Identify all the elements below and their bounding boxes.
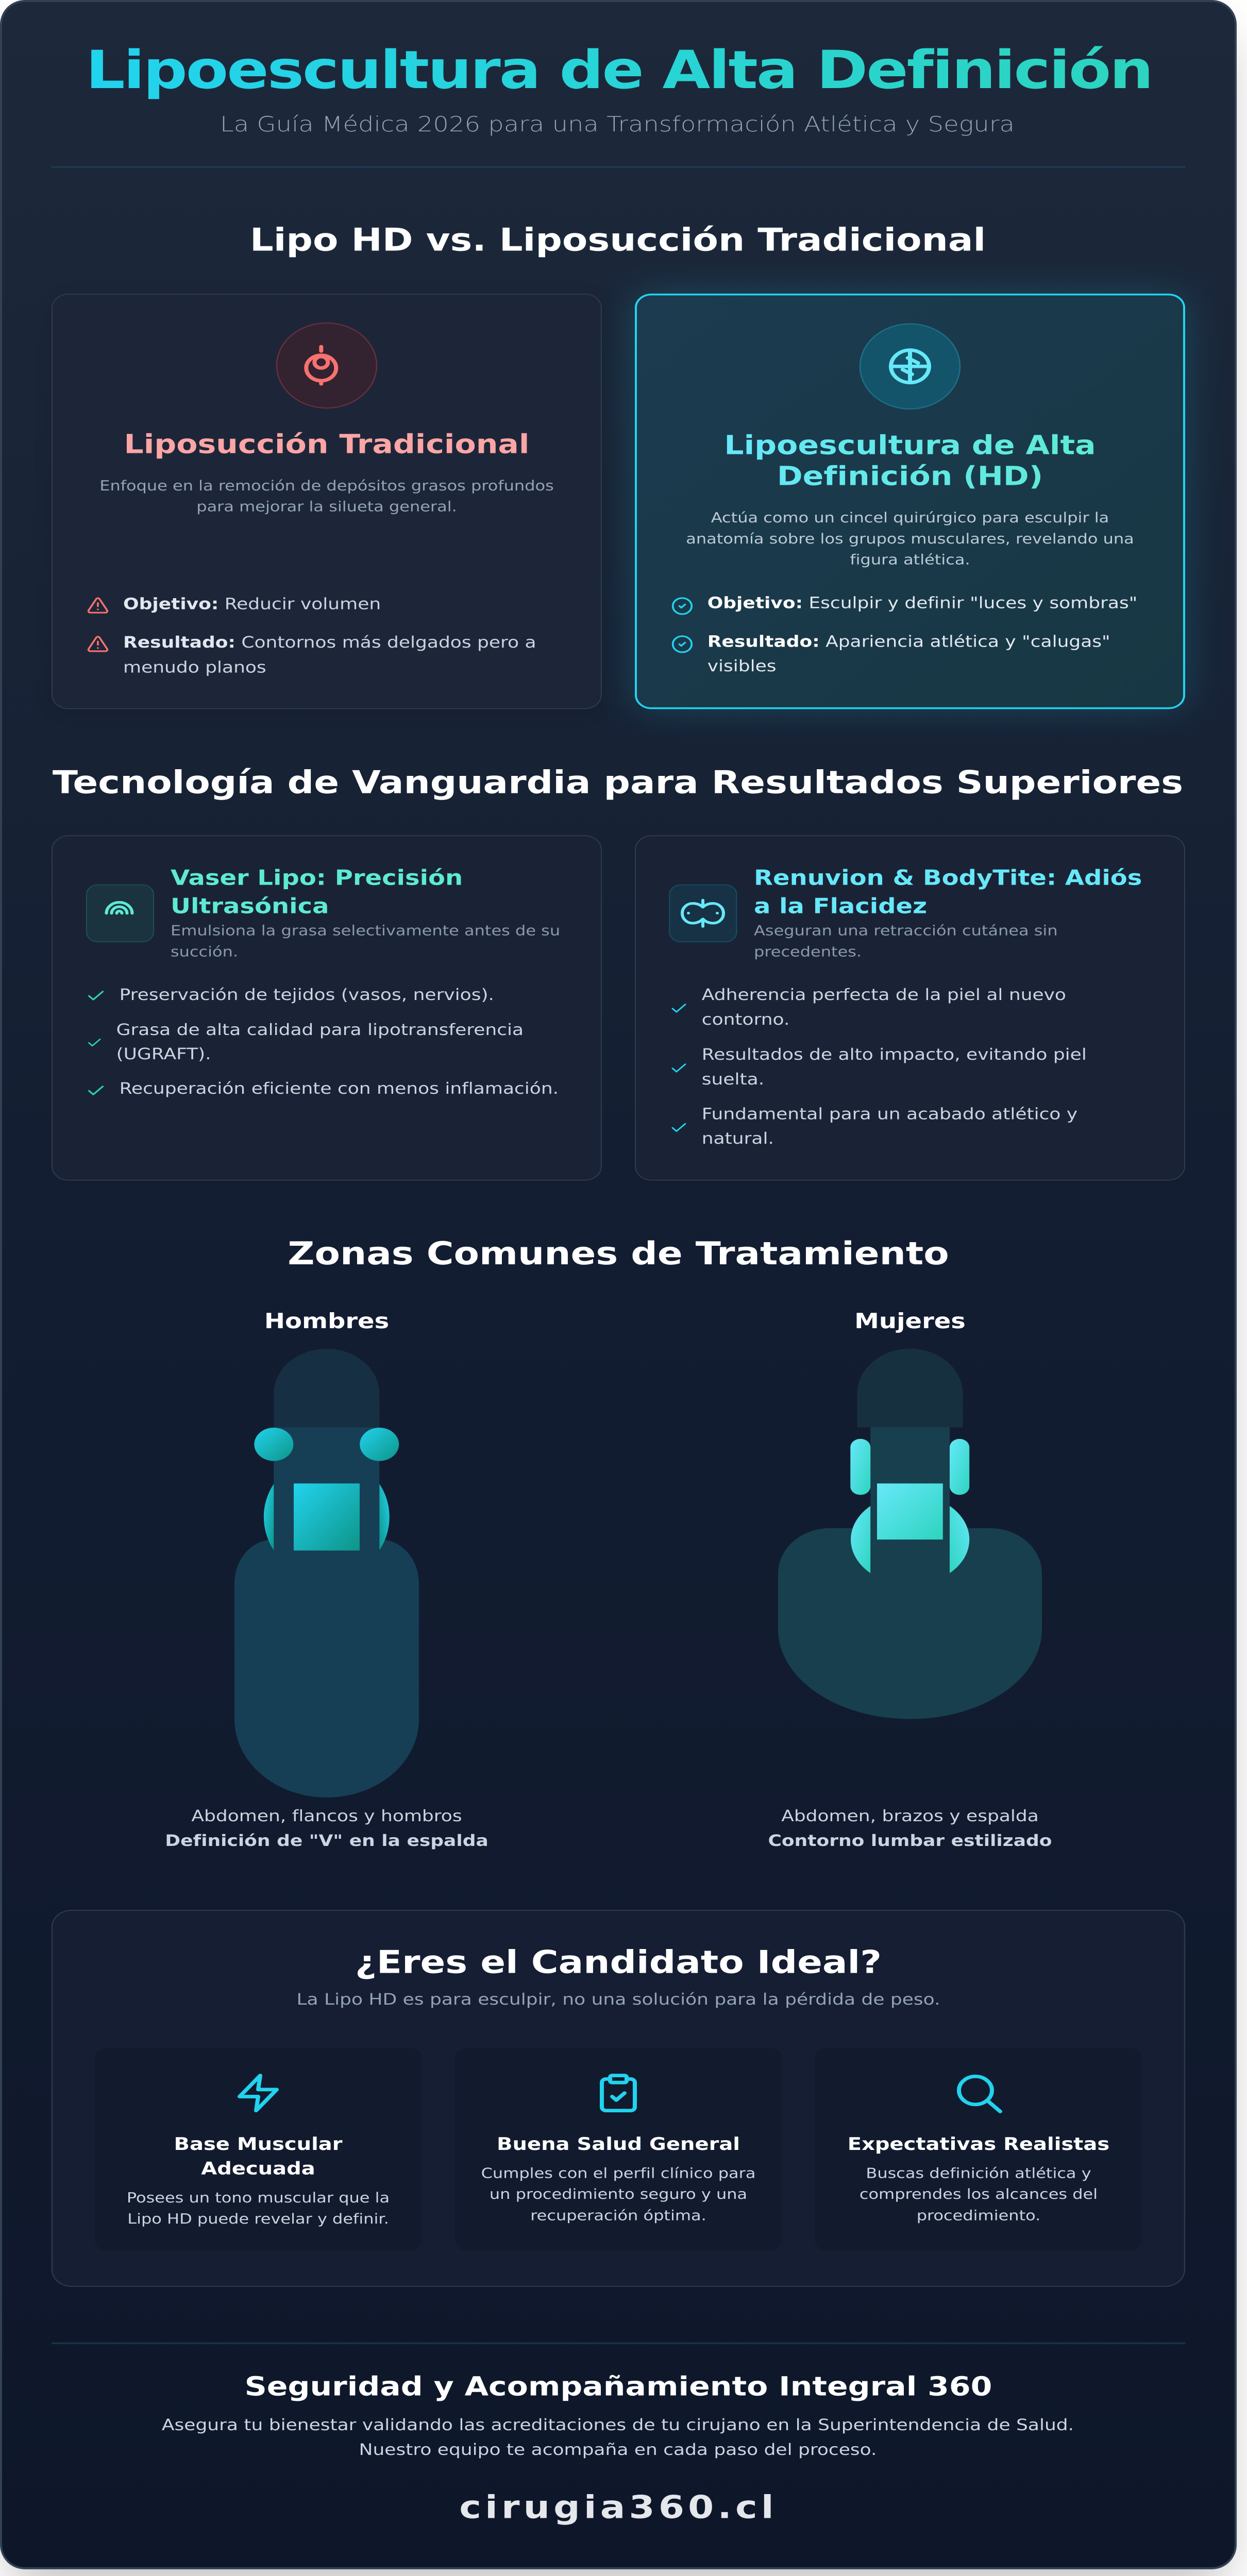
icon: ultrasound — [87, 885, 154, 942]
objective text: Objetivo: Esculpir y definir "luces y sombras" — [707, 594, 1137, 612]
title: Lipoescultura de Alta Definición — [86, 40, 1152, 101]
card description: Actúa como un cincel quirúrgico para esculpir la — [711, 509, 1109, 526]
list item 3: natural. — [702, 1130, 774, 1147]
heading: comparison: Lipo HD vs. Liposucción Tradicional — [250, 222, 986, 258]
candidate subtitle: La Lipo HD es para esculpir, no una solución para la pérdida de peso. — [296, 1991, 940, 2008]
panel: men — [165, 1309, 488, 1850]
icon: check 3 — [672, 1124, 685, 1131]
icon: check objective — [673, 598, 692, 614]
card title: Ultrasónica — [171, 894, 329, 919]
card title: Vaser Lipo: Precisión — [171, 866, 463, 890]
sub-card: muscle base — [95, 2048, 422, 2250]
list item 1: Adherencia perfecta de la piel al nuevo — [702, 986, 1066, 1004]
sub-card text: procedimiento. — [917, 2207, 1040, 2224]
subtitle: La Guía Médica 2026 para una Transformación Atlética y Segura — [220, 112, 1015, 137]
card title: a la Flacidez — [754, 894, 927, 919]
icon: fat deposit — [277, 323, 377, 408]
card subtitle: Aseguran una retracción cutánea sin — [754, 922, 1058, 939]
card description: figura atlética. — [850, 551, 970, 568]
card title: Liposucción Tradicional — [124, 429, 529, 460]
icon: warning objective — [89, 598, 107, 613]
female body diagram — [778, 1349, 1042, 1719]
candidate heading: ¿Eres el Candidato Ideal? — [355, 1944, 882, 1980]
list item 1: contorno. — [702, 1011, 789, 1028]
sub-card text: recuperación óptima. — [530, 2207, 706, 2224]
sub-card: realistic expectations — [815, 2048, 1142, 2250]
list item 2: Resultados de alto impacto, evitando piel — [702, 1046, 1087, 1063]
list item 2: Grasa de alta calidad para lipotransferencia — [116, 1021, 524, 1039]
icon: check 1 — [672, 1005, 685, 1012]
icon: check 2 — [672, 1064, 685, 1072]
sub-card text: Posees un tono muscular que la — [127, 2189, 390, 2206]
card title: Renuvion & BodyTite: Adiós — [754, 866, 1142, 890]
sub-card title: Expectativas Realistas — [848, 2134, 1109, 2154]
result text: visibles — [707, 657, 777, 675]
icon: check result — [673, 636, 692, 652]
footer heading: Seguridad y Acompañamiento Integral 360 — [245, 2371, 992, 2402]
sub-card text: comprendes los alcances del — [860, 2186, 1098, 2202]
men caption: Definición de "V" en la espalda — [165, 1832, 488, 1850]
women heading: Mujeres — [854, 1309, 966, 1333]
men caption: Abdomen, flancos y hombros — [191, 1807, 462, 1825]
icon: skin retraction — [670, 885, 737, 942]
card description: Enfoque en la remoción de depósitos grasos profundos — [99, 477, 554, 494]
icon: definition — [860, 324, 960, 409]
card description: anatomía sobre los grupos musculares, revelando una — [686, 530, 1134, 547]
card description: para mejorar la silueta general. — [196, 498, 457, 515]
card subtitle: precedentes. — [754, 943, 862, 960]
objective text: Objetivo: Reducir volumen — [123, 595, 381, 613]
card subtitle: Emulsiona la grasa selectivamente antes de su — [171, 922, 560, 939]
list item 2: (UGRAFT). — [116, 1045, 211, 1063]
icon: check 1 — [89, 992, 103, 999]
icon: bolt — [240, 2076, 277, 2111]
men heading: Hombres — [264, 1309, 389, 1333]
header — [86, 40, 1152, 137]
panel: vaser lipo — [52, 836, 601, 1180]
heading: treatment zones: Zonas Comunes de Tratamiento — [288, 1235, 949, 1272]
list item 1: Preservación de tejidos (vasos, nervios). — [120, 986, 494, 1004]
list item 2: suelta. — [702, 1071, 764, 1089]
result text: menudo planos — [123, 658, 266, 676]
panel: HD lipo — [635, 294, 1185, 709]
male body diagram — [234, 1349, 419, 1798]
sub-card: general health — [455, 2048, 782, 2250]
sub-card title: Base Muscular — [174, 2134, 343, 2154]
icon: clipboard check — [602, 2076, 635, 2111]
sub-card text: Cumples con el perfil clínico para — [481, 2165, 755, 2181]
icon: check 2 — [89, 1039, 100, 1046]
women caption: Contorno lumbar estilizado — [768, 1832, 1052, 1850]
icon: check 3 — [89, 1087, 103, 1094]
sub-card title: Adecuada — [201, 2159, 315, 2179]
footer text: Asegura tu bienestar validando las acreditaciones de tu cirujano en la Superintendencia de Salud. — [162, 2416, 1074, 2434]
card title: Definición (HD) — [777, 461, 1043, 492]
footer — [162, 2371, 1074, 2526]
card title: Lipoescultura de Alta — [724, 430, 1096, 461]
result text: Resultado: Apariencia atlética y "calugas" — [707, 633, 1110, 651]
women caption: Abdomen, brazos y espalda — [781, 1807, 1039, 1825]
list item 3: Fundamental para un acabado atlético y — [702, 1105, 1077, 1123]
sub-card title: Buena Salud General — [497, 2134, 740, 2154]
icon: warning result — [89, 637, 107, 651]
website: cirugia360.cl — [459, 2488, 778, 2526]
panel: women — [768, 1309, 1052, 1850]
footer text: Nuestro equipo te acompaña en cada paso del proceso. — [359, 2441, 877, 2459]
panel: traditional liposuction — [52, 294, 602, 713]
list item 3: Recuperación eficiente con menos inflamación. — [120, 1080, 559, 1098]
card subtitle: succión. — [171, 943, 238, 960]
sub-card text: Buscas definición atlética y — [866, 2165, 1091, 2181]
panel: ideal candidate — [52, 1910, 1185, 2286]
icon: magnifier — [959, 2076, 1000, 2111]
sub-card text: un procedimiento seguro y una — [490, 2186, 747, 2202]
result text: Resultado: Contornos más delgados pero a — [123, 634, 536, 652]
panel: renuvion and bodytite — [635, 836, 1185, 1180]
sub-card text: Lipo HD puede revelar y definir. — [127, 2211, 389, 2227]
heading: technology: Tecnología de Vanguardia para Resultados Superiores — [53, 764, 1183, 801]
